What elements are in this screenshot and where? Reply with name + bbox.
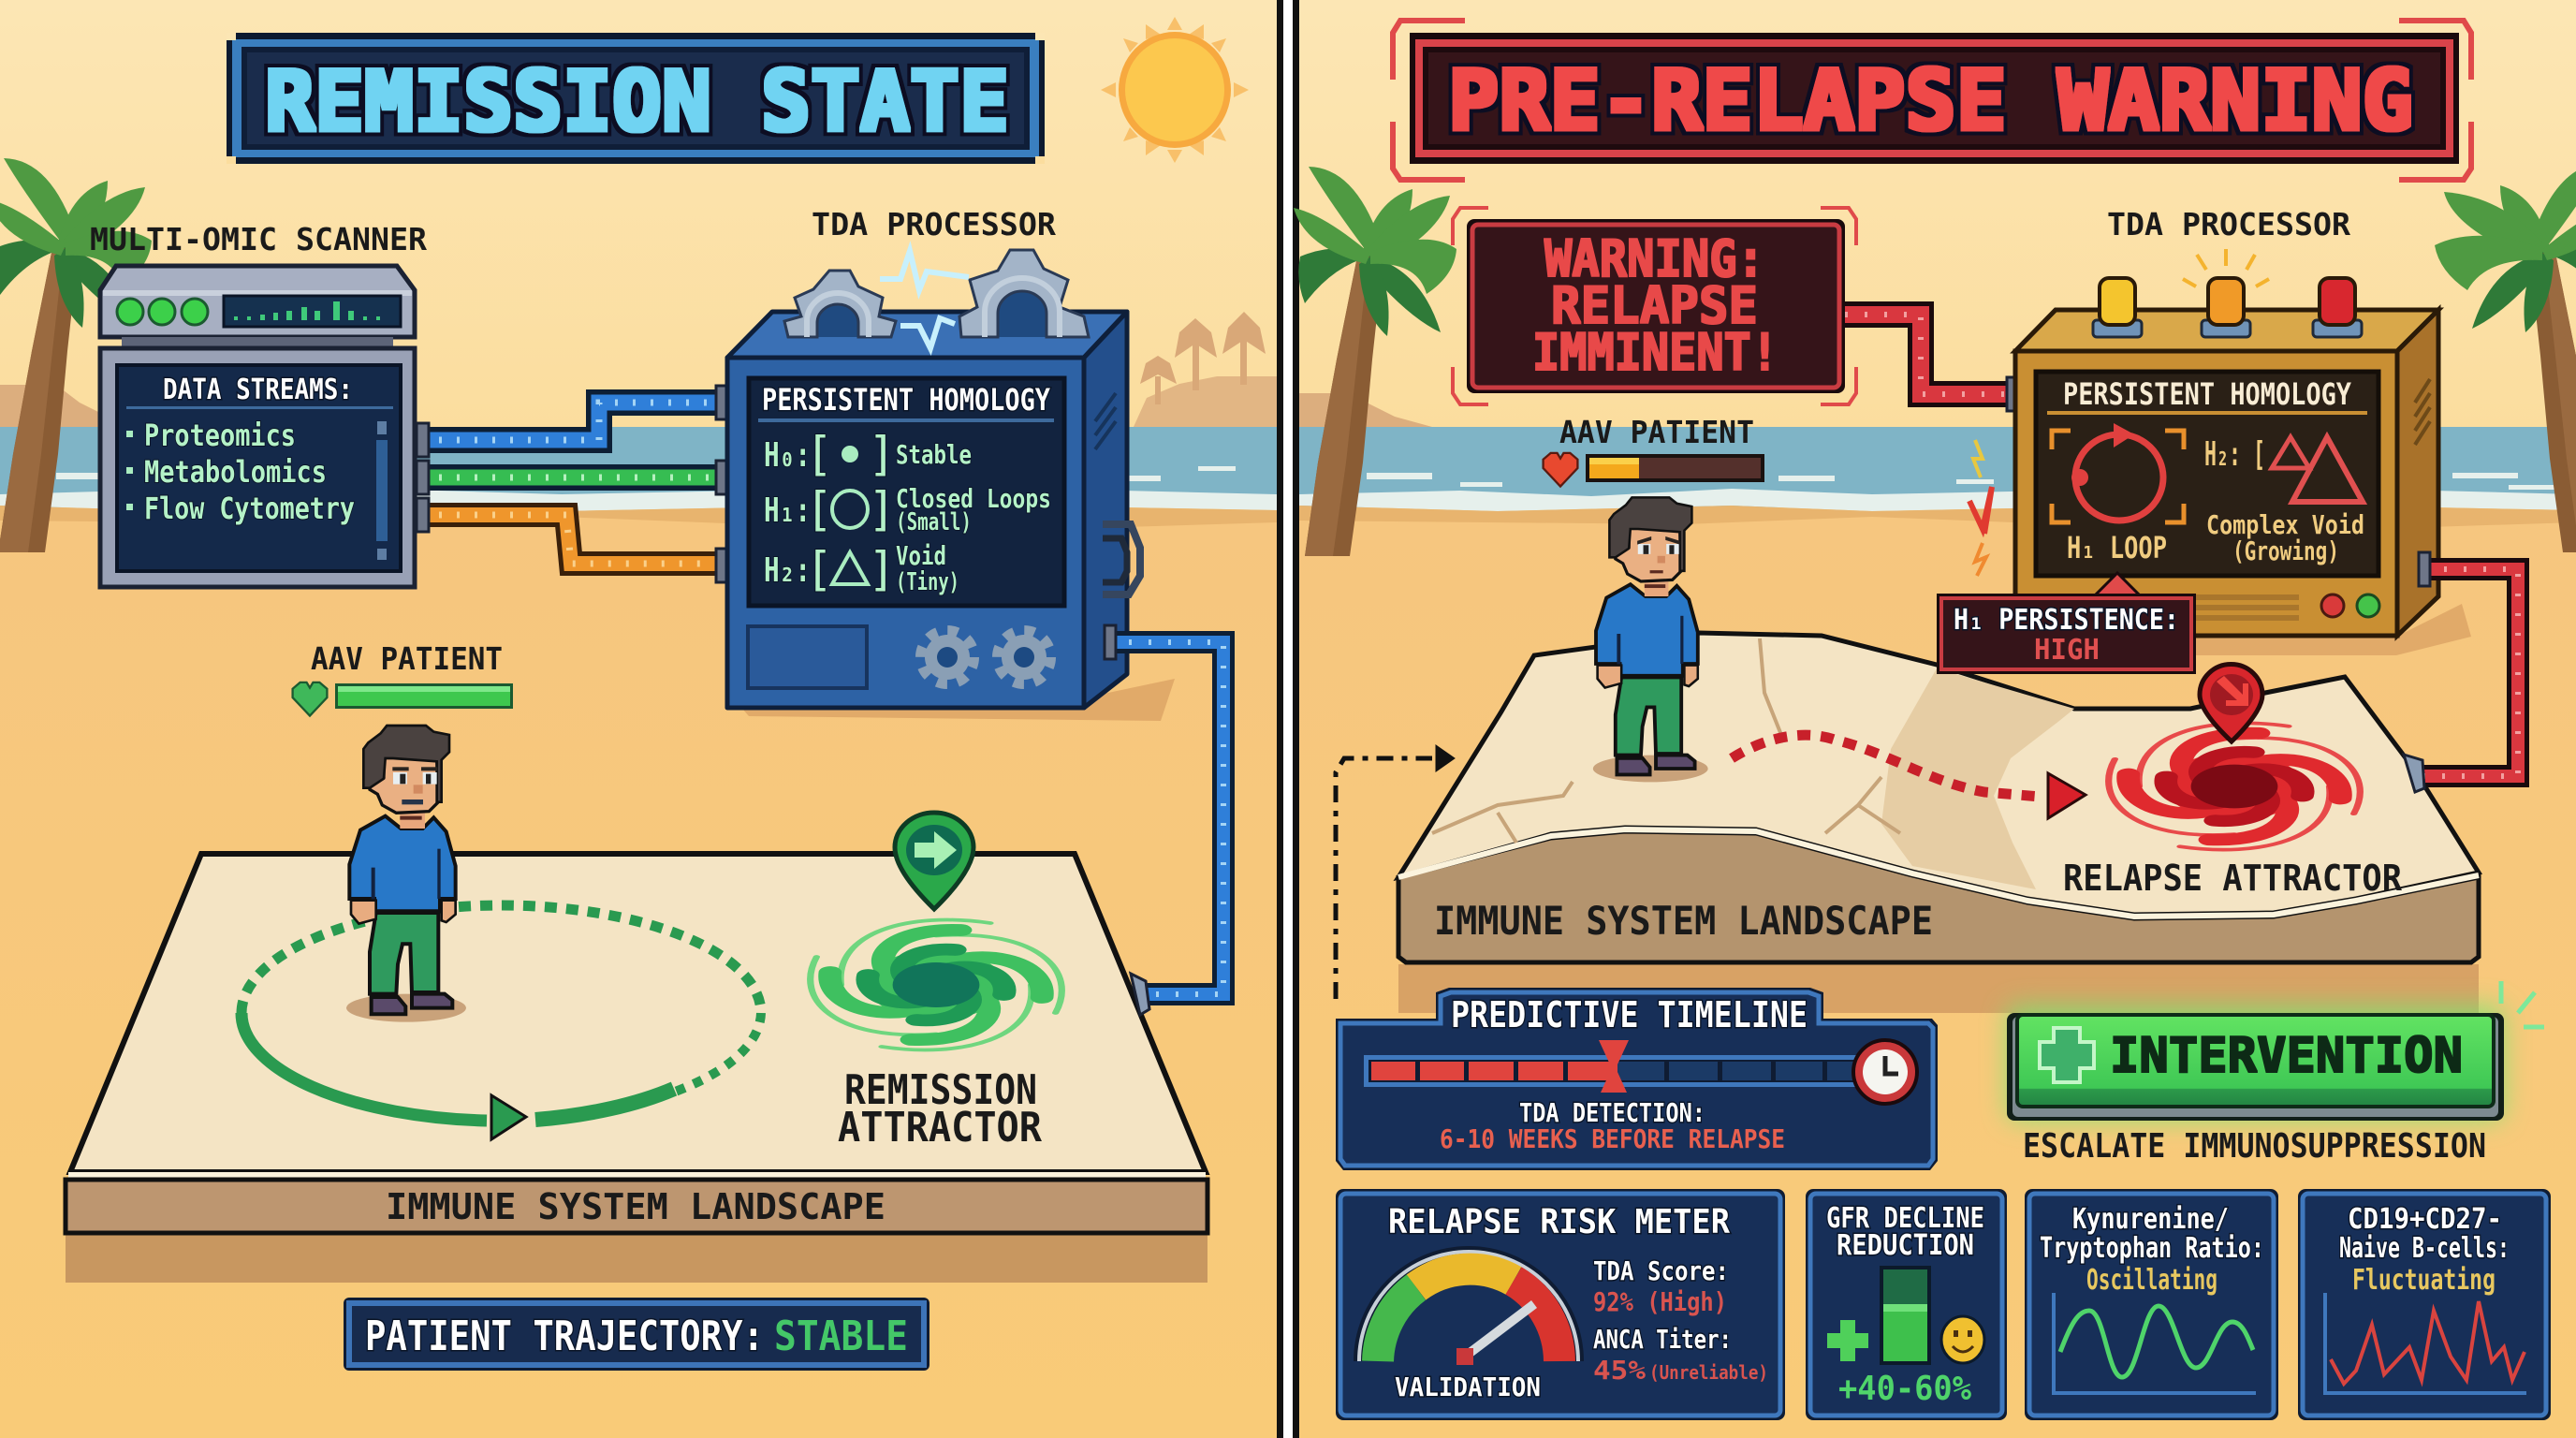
label: immune system landscape: IMMUNE SYSTEM LANDSCAPE: [386, 1186, 886, 1227]
panel: remission state background: [0, 0, 1277, 1438]
panel: GFR decline reduction: REDUCTION: [1837, 1229, 1974, 1262]
label: immune system landscape warped: IMMUNE SYSTEM LANDSCAPE: [1434, 898, 1933, 944]
icon: plus: [1827, 1320, 1868, 1361]
green cable: [421, 464, 721, 491]
scanner top unit: [100, 266, 415, 346]
label: remission attractor: ATTRACTOR: [838, 1104, 1042, 1152]
gears on top: [784, 250, 1089, 337]
data streams screen: Flow Cytometry: [144, 491, 355, 526]
label: escalate immunosuppression: ESCALATE IMMUNOSUPPRESSION: [2023, 1127, 2486, 1166]
callout: warning relapse imminent: [1453, 208, 1856, 404]
button: intervention: [2007, 981, 2544, 1121]
panel: kynurenine tryptophan ratio: Oscillating: [2086, 1264, 2217, 1297]
icon: green map pin: [895, 813, 973, 909]
icon: red map pin: [2200, 665, 2262, 741]
platform: immune system landscape flat: [66, 854, 1208, 1283]
panel: GFR decline reduction: [1806, 1189, 2007, 1420]
callout: H1 persistence high: H₁ PERSISTENCE:: [1954, 604, 2179, 637]
icon: patient character remission: [346, 726, 466, 1022]
persistent homology screen: ]: [868, 427, 896, 481]
panel: CD19 CD27 naive B-cells: Fluctuating: [2352, 1264, 2496, 1297]
processor body: [727, 312, 1127, 708]
label: relapse attractor: RELAPSE ATTRACTOR: [2063, 858, 2402, 899]
label: AAV patient warning: AAV PATIENT: [1559, 414, 1754, 450]
persistent homology screen: Stable: [896, 439, 972, 470]
callout: warning relapse imminent: RELAPSE: [1551, 276, 1758, 335]
panel: relapse risk meter: ANCA Titer:: [1593, 1324, 1732, 1355]
panel: predictive timeline: [1336, 988, 1938, 1170]
callout: H1 persistence high: HIGH: [2034, 634, 2100, 667]
connector: [1131, 974, 1149, 1015]
persistent homology screen: (Tiny): [896, 568, 959, 596]
title: pre-relapse warning: [1393, 21, 2471, 180]
persistent homology screen: [: [805, 542, 833, 596]
H2 complex void: Complex Void: [2206, 509, 2364, 540]
access plate: [748, 626, 867, 688]
side knob: [1103, 524, 1140, 594]
persistent homology screen: [749, 378, 1064, 606]
panel: kynurenine tryptophan ratio: [2025, 1189, 2278, 1420]
sparks: [2501, 981, 2544, 1027]
label: remission attractor: [838, 1066, 1042, 1152]
small gears: [921, 631, 1050, 683]
icon: clock: [1853, 1040, 1917, 1104]
icon: health bar low: [1544, 453, 1764, 487]
label: remission attractor: REMISSION: [844, 1066, 1037, 1114]
persistent homology screen: ]: [868, 542, 896, 596]
data streams screen: [100, 348, 415, 587]
divider between panels: [1277, 0, 1299, 1438]
label: multi-omic scanner: MULTI-OMIC SCANNER: [90, 221, 427, 257]
persistent homology screen: H₀:: [764, 436, 811, 475]
panel: relapse risk meter: TDA Score:: [1593, 1255, 1729, 1286]
icon: sun: [1101, 17, 1249, 163]
persistent homology screen: Void: [896, 540, 946, 571]
H1 loop icon: [2052, 423, 2184, 565]
H2 complex void: [2204, 435, 2364, 566]
panel: relapse risk meter: (Unreliable): [1649, 1361, 1768, 1384]
processor body: [2015, 310, 2438, 636]
button: intervention: INTERVENTION: [2110, 1028, 2463, 1084]
screen: PERSISTENT HOMOLOGY: [2063, 376, 2352, 412]
icon: TDA processor warning: [2015, 249, 2471, 655]
H2 complex void: (Growing): [2232, 536, 2339, 566]
callout: warning relapse imminent: IMMINENT!: [1532, 323, 1778, 382]
icon: energy pulse: [880, 251, 969, 290]
arrow: trajectory toward relapse attractor: [1732, 735, 2086, 818]
alarm lights: [2093, 249, 2362, 337]
label: TDA processor: TDA PROCESSOR: [812, 206, 1056, 242]
blue cable: [421, 403, 721, 440]
timeline bar: [1364, 1040, 1863, 1093]
title: remission state: [227, 33, 1045, 164]
status bar: patient trajectory: PATIENT TRAJECTORY:: [365, 1313, 764, 1360]
icon: palm tree right panel left: [1294, 167, 1456, 556]
persistent homology screen: H₂:: [764, 551, 811, 590]
callout: warning relapse imminent: WARNING:: [1544, 229, 1764, 288]
H1 loop icon: H₁ LOOP: [2067, 530, 2167, 565]
persistent homology screen: PERSISTENT HOMOLOGY: [762, 382, 1051, 418]
panel: kynurenine tryptophan ratio: Tryptophan Ratio:: [2040, 1232, 2264, 1265]
icon: warning sparks: [1969, 440, 1992, 576]
arrow: blue cable to landscape: [1105, 625, 1223, 994]
data streams screen: DATA STREAMS:: [163, 374, 353, 406]
panel: kynurenine tryptophan ratio: Kynurenine/: [2072, 1203, 2229, 1236]
screen: [2036, 372, 2378, 576]
persistent homology screen: ]: [868, 482, 896, 536]
chart: oscillating wave: [2054, 1293, 2256, 1393]
panel: CD19 CD27 naive B-cells: CD19+CD27-: [2348, 1203, 2502, 1236]
callout: H1 persistence high: [1937, 573, 2196, 674]
panel: pre-relapse warning background: [1299, 0, 2576, 1438]
chart: gauge: [1358, 1251, 1579, 1365]
panel: relapse risk meter: VALIDATION: [1395, 1372, 1541, 1402]
panel: relapse risk meter: 45%: [1593, 1355, 1646, 1386]
data streams screen: Metabolomics: [144, 454, 327, 490]
data streams screen: Proteomics: [144, 418, 296, 453]
icon: multi-omic scanner: [100, 266, 415, 587]
arrow: red cable processor to landscape: [2419, 552, 2518, 776]
persistent homology screen: H₁:: [764, 492, 811, 530]
arrow: data cables scanner to processor: [417, 386, 727, 582]
label: TDA processor warning: TDA PROCESSOR: [2107, 206, 2350, 242]
panel: relapse risk meter: 92% (High): [1593, 1286, 1727, 1317]
darker valley patch: [1881, 668, 2074, 889]
connector: [2404, 755, 2424, 792]
panel: predictive timeline: PREDICTIVE TIMELINE: [1451, 994, 1808, 1035]
chart: fluctuating spikes: [2325, 1293, 2526, 1393]
title: remission state: REMISSION STATE: [265, 53, 1009, 150]
icon: patient character worried: [1593, 497, 1708, 782]
terrain cracks: [1432, 638, 1900, 843]
persistent homology screen: (Small): [896, 508, 972, 536]
panel: CD19 CD27 naive B-cells: [2298, 1189, 2551, 1420]
title: pre-relapse warning: PRE-RELAPSE WARNING: [1448, 52, 2413, 149]
arrow: red cable warning to processor: [1845, 315, 2018, 411]
icon: remission attractor swirl: [811, 920, 1061, 1049]
icon: health bar full: [293, 682, 513, 716]
persistent homology screen: [: [805, 427, 833, 481]
platform: immune system landscape warped: [1398, 633, 2479, 1013]
icon: palm tree left: [0, 158, 152, 552]
status bar: patient trajectory: STABLE: [774, 1313, 908, 1360]
orange cable: [421, 515, 721, 564]
persistent homology screen: [: [805, 482, 833, 536]
arrow: dashed feedback line: [1336, 745, 1455, 999]
icon: smiley: [1941, 1316, 1984, 1363]
icon: TDA processor remission: [727, 250, 1175, 721]
panel: relapse risk meter: [1336, 1189, 1785, 1420]
panel: GFR decline reduction: +40-60%: [1838, 1370, 1971, 1408]
chart: stable loop trajectory: [242, 905, 761, 1139]
icon: plus: [2040, 1028, 2094, 1082]
panel: GFR decline reduction: GFR DECLINE: [1826, 1202, 1984, 1235]
label: AAV patient: AAV PATIENT: [311, 640, 503, 677]
panel: predictive timeline: TDA DETECTION:: [1519, 1097, 1705, 1128]
panel: CD19 CD27 naive B-cells: Naive B-cells:: [2339, 1232, 2510, 1265]
bar chart: [1881, 1268, 1929, 1363]
status bar: patient trajectory: [344, 1298, 929, 1371]
icon: relapse attractor swirl: [2109, 723, 2360, 850]
panel: relapse risk meter: RELAPSE RISK METER: [1388, 1203, 1730, 1241]
persistent homology screen: Closed Loops: [896, 483, 1051, 514]
icon: palm tree right panel right: [2435, 163, 2576, 552]
H2 complex void: H₂: [: [2204, 435, 2265, 474]
panel: predictive timeline: 6-10 WEEKS BEFORE RELAPSE: [1440, 1123, 1785, 1154]
